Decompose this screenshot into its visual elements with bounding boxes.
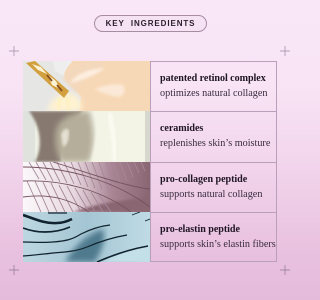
text: ceramides: ceramides [160,122,203,134]
text: retinol: optimizes natural collagen [160,88,268,98]
icon: plus top right [280,46,290,56]
panel: pro-elastin peptide [150,212,277,262]
text: retinol: patented retinol complex [160,72,266,84]
icon: plus bottom left [9,265,19,275]
title pill: KEY INGREDIENTS [106,19,195,28]
title pill [94,15,207,32]
panel: pro-collagen peptide [150,162,277,213]
text: pro-elastin: supports skin’s elastin fibers [160,238,276,250]
ingredient photo strip [23,61,150,262]
text: pro-collagen: supports natural collagen [160,188,262,200]
text: ceramides: replenishes skin’s moisture [160,138,270,148]
icon: plus top left [9,46,19,56]
photo: pro-elastin waves [23,212,150,262]
icon: plus bottom right [280,265,290,275]
text: retinol [160,72,268,98]
photo: retinol [23,61,150,111]
photo: ceramides [23,111,150,162]
text: pro-elastin [160,224,276,250]
photo: pro-collagen leaf [23,162,150,212]
text: ceramides [160,122,270,148]
panel: ceramides [150,111,277,163]
text: pro-elastin: pro-elastin peptide [160,224,240,234]
panel: patented retinol complex [150,61,277,112]
text: pro-collagen [160,174,262,200]
text: pro-collagen: pro-collagen peptide [160,174,247,184]
